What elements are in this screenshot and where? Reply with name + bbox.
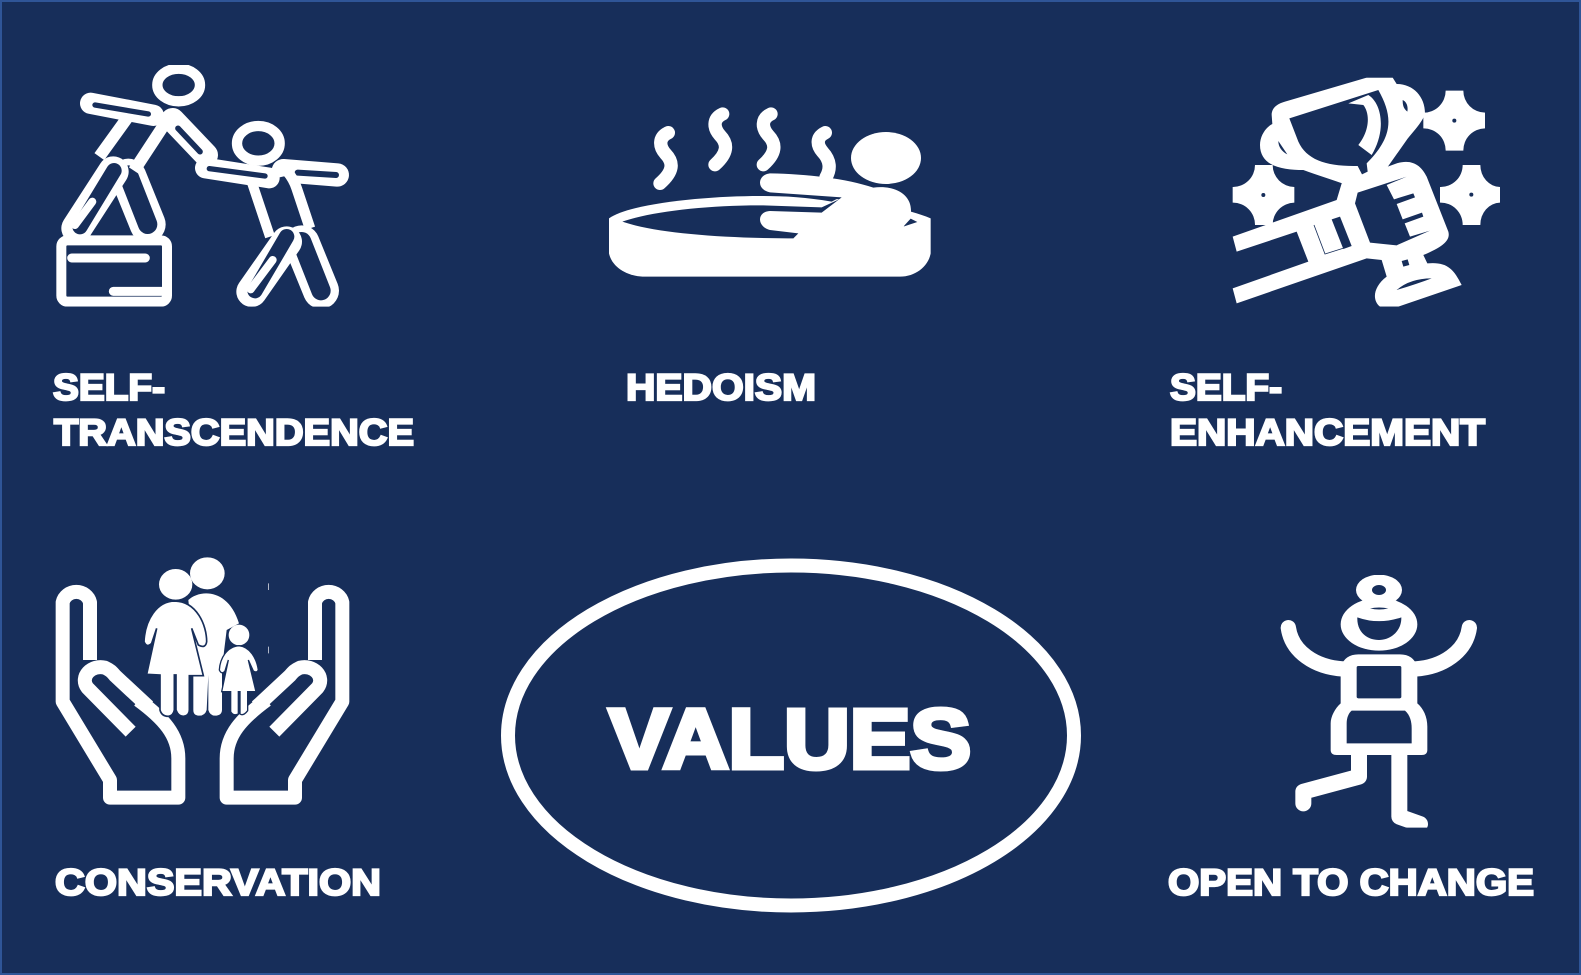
- arms and legs: [1288, 628, 1469, 824]
- tub: [609, 196, 931, 277]
- label: open to change: OPEN TO CHANGE: [1168, 862, 1534, 903]
- label: conservation: CONSERVATION: [55, 862, 381, 903]
- first person back leg: [128, 177, 148, 224]
- panel: self-enhancement: [1170, 78, 1500, 453]
- second person right arm: [283, 171, 337, 175]
- second person head: [237, 126, 280, 161]
- bather: [851, 132, 921, 184]
- label: self-enhancement: SELF-: [1170, 367, 1282, 408]
- fist and sleeve: [1233, 162, 1462, 307]
- icon: fist holding trophy with sparkles: [1233, 78, 1500, 307]
- panel: central values oval: [508, 566, 1074, 906]
- icon: hands holding a family: [63, 557, 342, 798]
- child: [229, 625, 249, 645]
- icon: dancing figure: [1288, 575, 1469, 824]
- father: [190, 557, 225, 589]
- panel: hedonism: [609, 114, 931, 408]
- second person front leg: [252, 242, 287, 292]
- mother: [159, 569, 192, 600]
- first person arm pill: [91, 103, 153, 115]
- icon: two people helping each other climb: [61, 69, 337, 302]
- label: self-enhancement: ENHANCEMENT: [1170, 412, 1485, 453]
- trophy: [1260, 78, 1425, 185]
- panel: open to change: [1168, 575, 1534, 903]
- panel: self-transcendence: [53, 69, 414, 453]
- label: self-transcendence: [53, 367, 414, 453]
- icon: person relaxing in hot tub: [609, 114, 931, 277]
- left hand: [63, 592, 178, 798]
- panel: conservation: [55, 557, 381, 903]
- second person left arm: [205, 168, 269, 178]
- sparkles: [1233, 91, 1500, 225]
- label: self-transcendence: SELF-: [53, 367, 165, 408]
- label: self-enhancement: [1170, 367, 1485, 453]
- first person reaching arm: [173, 120, 206, 155]
- second person torso: [279, 176, 288, 183]
- head: [1341, 598, 1417, 651]
- torso and skirt: [1331, 654, 1427, 755]
- right hand: [227, 592, 342, 798]
- oval outline: [508, 566, 1074, 906]
- box: [61, 240, 167, 302]
- first person front leg: [77, 172, 113, 228]
- label: self-transcendence: TRANSCENDENCE: [54, 412, 414, 453]
- second person back leg: [302, 243, 321, 291]
- steam: [660, 114, 829, 183]
- label: hedonism: HEDOISM: [626, 367, 816, 408]
- first person head: [157, 69, 200, 101]
- first person torso: [99, 115, 168, 171]
- bun: [1356, 575, 1402, 601]
- title: values: VALUES: [609, 692, 971, 786]
